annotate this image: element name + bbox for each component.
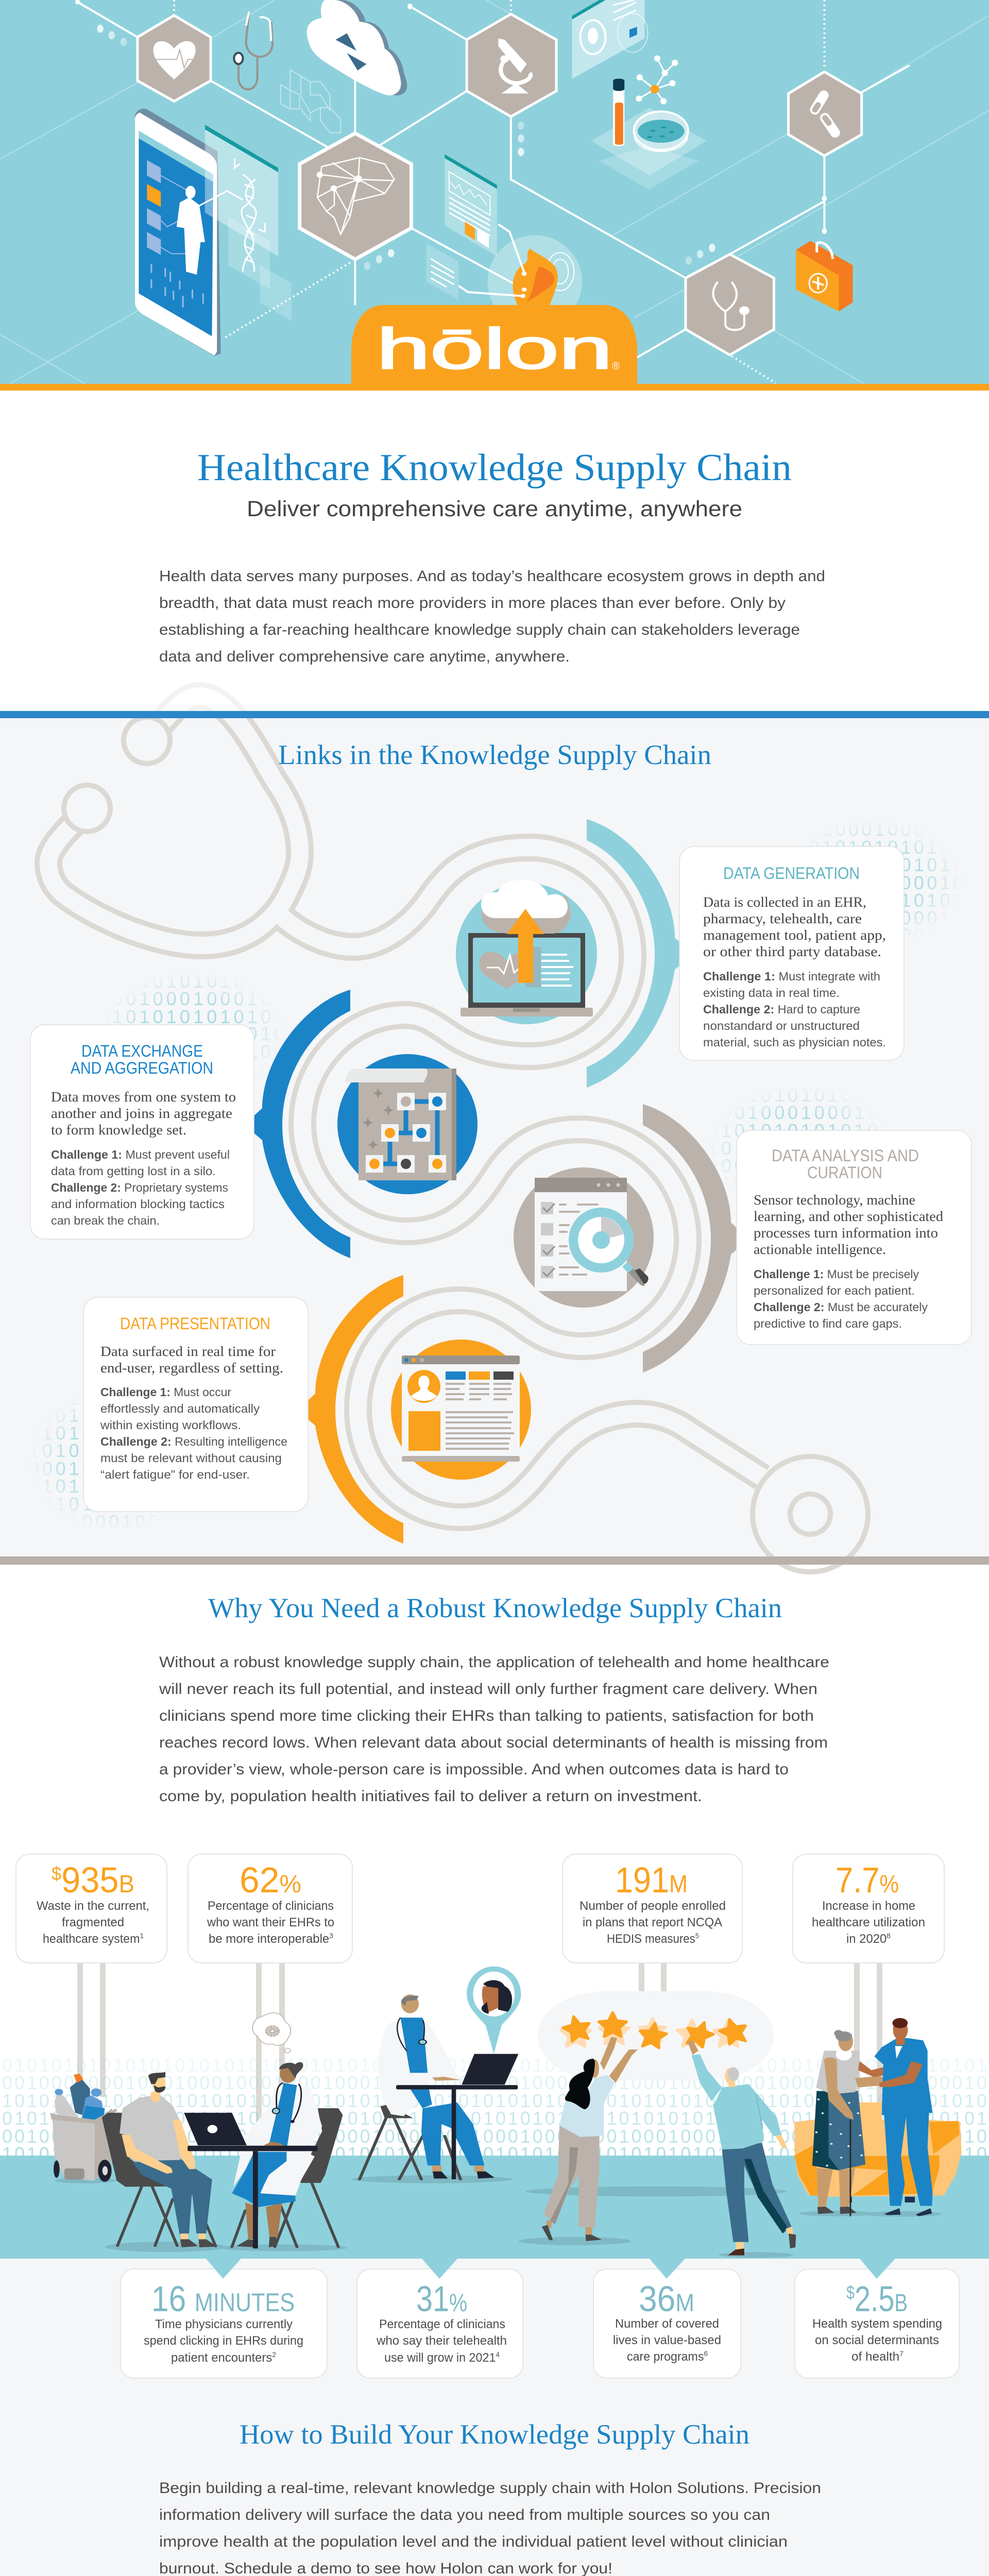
stat description: 5	[695, 1931, 699, 1940]
stat card: 2.5B	[795, 2259, 959, 2378]
challenges: data exchange: and information blocking tactics	[51, 1197, 225, 1211]
binary block left	[105, 975, 279, 1076]
scene: patient, trash and doctor at desk	[50, 2013, 347, 2252]
binary block left: 01010101010101	[99, 1059, 284, 1080]
stat description	[37, 1899, 149, 1946]
binary strip behind scene: 10101010101010101010101010101010101010101010101010101010101010101010101010101010	[2, 2143, 987, 2164]
stat description: 4	[496, 2350, 500, 2359]
stat number: 2.5	[855, 2279, 894, 2319]
binary block top right: 00101000100010	[783, 925, 963, 946]
challenges: data presentation: Challenge 2: Resulting intelligence	[100, 1435, 287, 1448]
crescent: data generation	[587, 819, 693, 1088]
binary block bottom left: 0001000100010	[29, 1458, 199, 1479]
challenges: data presentation: Challenge 1: Must occur	[100, 1385, 231, 1399]
challenges: data presentation	[100, 1385, 287, 1481]
challenges: data generation: material, such as physician notes.	[703, 1036, 886, 1049]
binary block bottom left: 1010101010101	[29, 1440, 199, 1461]
icon: DNA panel	[205, 125, 292, 321]
binary block top right: 10101010101010	[783, 854, 963, 875]
stat description: HEDIS measures	[607, 1932, 702, 1946]
stat card: 31 percent	[357, 2259, 523, 2378]
challenges: data generation: Challenge 1: Must integrate with	[703, 970, 880, 983]
icon: cloud	[307, 0, 407, 95]
how to build paragraph	[159, 2480, 821, 2576]
binary block left: 00010001000100	[99, 988, 284, 1009]
stat description: Number of people enrolled	[579, 1899, 726, 1913]
logo tab: ®	[612, 361, 620, 372]
stat description: use will grow in 2021	[384, 2351, 499, 2365]
binary block top right: 00101010100010	[783, 872, 963, 893]
stat description: Increase in home	[822, 1899, 915, 1913]
chair: patient	[102, 2113, 216, 2246]
stat description: 7	[899, 2349, 903, 2358]
blue divider bar	[0, 711, 989, 718]
binary block left: 10101010101010	[99, 1077, 284, 1098]
panel: data analysis and curation	[737, 1130, 971, 1345]
description: data generation: management tool, patient app,	[703, 927, 886, 943]
stat description	[579, 1899, 726, 1946]
sofa	[794, 2103, 962, 2202]
binary block bottom left	[33, 1400, 158, 1528]
stethoscope chain line	[48, 696, 762, 1517]
older man reaching figure	[688, 2040, 796, 2256]
connector lines	[78, 0, 910, 383]
crescent: data exchange	[244, 990, 350, 1258]
section heading: how to build: How to Build Your Knowledge Supply Chain	[240, 2419, 749, 2450]
stat description: spend clicking in EHRs during	[144, 2334, 303, 2348]
heading: data generation: DATA GENERATION	[723, 864, 860, 883]
chair: doctor	[232, 2108, 343, 2247]
stat description	[376, 2317, 507, 2365]
stat description: fragmented	[62, 1916, 124, 1929]
description: data exchange: Data moves from one system to	[51, 1089, 236, 1105]
stat description	[144, 2317, 303, 2365]
stool	[360, 2105, 461, 2179]
description: data generation: pharmacy, telehealth, care	[703, 911, 862, 926]
challenges: data analysis: Challenge 1: Must be precisely	[754, 1267, 919, 1281]
standing doctor figure	[377, 1994, 494, 2178]
intro paragraph: Health data serves many purposes. And as today’s healthcare ecosystem grows in depth and	[159, 568, 825, 585]
senior woman figure	[812, 2030, 892, 2216]
why paragraph	[159, 1654, 829, 1805]
challenges: data analysis: personalized for each patient.	[754, 1284, 915, 1297]
seated doctor figure	[232, 2062, 322, 2247]
description: data exchange: another and joins in aggregate	[51, 1106, 232, 1121]
stat description: Time physicians currently	[155, 2317, 293, 2331]
binary strip behind scene: 01010101010101010101010101010101010101010101010101010101010101010101010101010101	[2, 2055, 987, 2076]
patient figure	[120, 2072, 217, 2247]
binary block top right: 01010101010101	[783, 837, 963, 858]
binary block centre right: 10101010101010	[708, 1190, 891, 1211]
stat description: Number of covered	[615, 2317, 719, 2331]
stat number: 191M	[615, 1860, 688, 1900]
stat description: Percentage of clinicians	[379, 2317, 505, 2331]
stat description: 2	[272, 2350, 276, 2359]
binary strip behind scene: 00100010001000100010001000100010001000100010001000100010001000100010001000100010	[2, 2126, 987, 2147]
heading: data presentation: DATA PRESENTATION	[120, 1314, 270, 1333]
how to build paragraph: information delivery will surface the data you need from multiple sources so you can	[159, 2506, 770, 2523]
stat card: 191M	[562, 1854, 742, 1963]
panel: data exchange and aggregation	[30, 1025, 254, 1239]
binary block left: 10101010101010	[99, 1023, 284, 1044]
logo tab	[351, 305, 637, 384]
why paragraph: come by, population health initiatives fail to deliver a return on investment.	[159, 1788, 702, 1805]
description: data generation: Data is collected in an EHR,	[703, 894, 866, 910]
stat description: patient encounters	[171, 2351, 272, 2365]
subtitle: Deliver comprehensive care anytime, anywhere	[247, 497, 742, 521]
logo wordmark: hōlon	[377, 317, 612, 381]
intro paragraph: establishing a far-reaching healthcare knowledge supply chain can stakeholders leverage	[159, 621, 800, 638]
stat number: 935	[61, 1860, 118, 1900]
desk and laptop	[396, 2054, 519, 2179]
hero banner	[0, 0, 989, 384]
binary block top right	[810, 822, 958, 937]
scene: people reaching for stars and senior care	[519, 2012, 962, 2258]
section heading: links: Links in the Knowledge Supply Chain	[278, 739, 711, 770]
challenges: data exchange	[51, 1148, 230, 1227]
woman reaching figure	[542, 2037, 638, 2241]
stat description	[207, 1899, 334, 1946]
stat description: who want their EHRs to	[207, 1916, 334, 1929]
stat number: $	[846, 2282, 855, 2303]
stat card: 36M	[593, 2259, 741, 2378]
challenges: data presentation: must be relevant without causing	[100, 1451, 282, 1465]
description: data exchange: to form knowledge set.	[51, 1122, 186, 1138]
challenges: data presentation: within existing workflows.	[100, 1418, 241, 1432]
why paragraph: reaches record lows. When relevant data about social determinants of health is missing from	[159, 1734, 828, 1751]
stat description: be more interoperable	[209, 1932, 330, 1946]
main title: Healthcare Knowledge Supply Chain	[197, 447, 792, 489]
stat description: healthcare system	[43, 1932, 143, 1946]
crescent: data analysis	[643, 1104, 749, 1372]
heading: data exchange	[71, 1042, 213, 1077]
description: data analysis: Sensor technology, machine	[754, 1192, 915, 1208]
desk and laptop	[184, 2113, 318, 2248]
icon: document panels	[427, 154, 497, 300]
challenges: data analysis: Challenge 2: Must be accurately	[754, 1300, 928, 1314]
shadows	[519, 2187, 942, 2258]
challenges: data exchange: Challenge 1: Must prevent useful	[51, 1148, 230, 1161]
stethoscope faint top above divider	[155, 682, 247, 711]
binary block left: 00010001000100	[99, 1041, 284, 1062]
why paragraph: will never reach its full potential, and instead will only further fragment care delivery. When	[159, 1681, 817, 1698]
stat card: 935B waste	[16, 1854, 167, 1963]
stat description	[613, 2317, 721, 2364]
stat number: 31%	[416, 2279, 467, 2319]
stat card: 16 minutes	[121, 2259, 327, 2378]
icon: anatomical heart	[458, 224, 582, 329]
speech bubble for stars	[538, 1991, 774, 2080]
description: data presentation: end-user, regardless of setting.	[100, 1360, 283, 1376]
binary block centre right: 10101010101010	[708, 1138, 891, 1159]
section heading: why: Why You Need a Robust Knowledge Supply Chain	[208, 1592, 782, 1623]
orange banner bar	[0, 384, 989, 391]
icon: laptop with cloud upload	[456, 880, 597, 1024]
heading: data analysis	[772, 1146, 919, 1182]
nurse figure	[858, 2018, 932, 2216]
intro paragraph: data and deliver comprehensive care anytime, anywhere.	[159, 648, 570, 665]
stat number: 36M	[639, 2279, 694, 2319]
icon: tablet with patient record	[135, 109, 243, 356]
icon: circuit board document	[337, 1054, 478, 1194]
description: data presentation: Data surfaced in real time for	[100, 1344, 276, 1359]
how to build paragraph: improve health at the population level and the individual patient level without clinician	[159, 2533, 788, 2550]
description: data analysis	[754, 1192, 944, 1257]
icon: wire cubes	[281, 70, 340, 133]
stat description: healthcare utilization	[812, 1916, 925, 1929]
icon: hexagon brain	[300, 133, 411, 259]
icon: stethoscope	[234, 11, 272, 89]
icon: location pin with face	[467, 1967, 521, 2054]
stat description	[812, 1899, 925, 1946]
binary block centre right: 00010001000100	[708, 1102, 891, 1123]
intro paragraph	[159, 568, 825, 665]
description: data generation	[703, 894, 886, 959]
stat number: $	[52, 1863, 61, 1884]
challenges: data analysis: predictive to find care gaps.	[754, 1317, 902, 1330]
scene: doctor on laptop with location pin	[351, 1967, 521, 2183]
stat number: B	[118, 1871, 134, 1898]
binary block centre right	[713, 1088, 877, 1187]
binary block top right: 10001010100010	[783, 907, 963, 928]
challenges: data generation: existing data in real time.	[703, 986, 840, 999]
thought bubble with gear	[252, 2013, 291, 2053]
binary background blocks	[29, 819, 963, 1532]
icon: hexagon pills	[789, 72, 862, 156]
binary strip behind scene: 00100010001000100010001000100010001000100010001000100010001000100010001000100010	[2, 2072, 987, 2093]
why paragraph: a provider’s view, whole-person care is impossible. And when outcomes data is hard to	[159, 1761, 789, 1778]
stat description	[812, 2317, 942, 2364]
panel: data presentation	[83, 1297, 308, 1512]
why paragraph: clinicians spend more time clicking their EHRs than talking to patients, satisfaction for both	[159, 1707, 814, 1724]
challenges: data exchange: Challenge 2: Proprietary systems	[51, 1181, 228, 1194]
thin diagonal grid lines	[0, 0, 989, 384]
binary block centre right: 01010101010101	[708, 1120, 891, 1141]
stat description: who say their telehealth	[376, 2334, 507, 2348]
stat description: care programs	[627, 2350, 707, 2364]
stat card: 7.7 percent	[793, 1854, 944, 1963]
crescent: data presentation	[297, 1275, 403, 1544]
signpost poles	[77, 1963, 882, 2128]
shadow	[351, 2175, 513, 2183]
grey divider bar	[0, 1556, 989, 1565]
challenges: data exchange: can break the chain.	[51, 1214, 160, 1227]
binary block top right: 01010101010101	[783, 890, 963, 911]
stat description: Waste in the current,	[37, 1899, 149, 1913]
callout pointer	[206, 2259, 241, 2279]
description: data generation: or other third party database.	[703, 944, 881, 959]
binary block bottom left: 0101010101010	[29, 1476, 199, 1497]
challenges: data analysis	[754, 1267, 928, 1330]
binary block bottom left: 0001000100010	[29, 1511, 199, 1532]
icon: window panel	[572, 0, 648, 79]
stat description: lives in value-based	[613, 2333, 721, 2347]
binary block top right: 00010001000100	[783, 819, 963, 840]
binary block left: 01010101010101	[99, 1006, 284, 1027]
description: data exchange	[51, 1089, 236, 1138]
binary strip behind scene	[2, 2055, 987, 2164]
icon: hexagon microscope	[467, 14, 556, 116]
stat description: Percentage of clinicians	[208, 1899, 334, 1913]
stat description: 1	[140, 1931, 144, 1940]
shadows	[55, 2178, 347, 2252]
description: data presentation	[100, 1344, 283, 1376]
description: data analysis: actionable intelligence.	[754, 1242, 886, 1257]
stat description: in plans that report NCQA	[583, 1916, 722, 1929]
challenges: data generation: nonstandard or unstructured	[703, 1019, 860, 1032]
stat description: on social determinants	[815, 2333, 939, 2347]
icon: petri dish and test tube	[591, 55, 706, 190]
heading: data analysis: DATA ANALYSIS AND	[772, 1146, 919, 1165]
heading: data exchange: DATA EXCHANGE	[81, 1042, 203, 1060]
stethoscope chest piece	[753, 1456, 868, 1572]
stat description: 8	[886, 1931, 891, 1940]
binary block centre right: 00010001000100	[708, 1155, 891, 1176]
challenges: data presentation: effortlessly and automatically	[100, 1402, 260, 1415]
binary strip behind scene: 01010101010101010101010101010101010101010101010101010101010101010101010101010101	[2, 2108, 987, 2129]
binary block bottom left: 0101010101010	[29, 1422, 199, 1444]
binary block bottom left: 0101010101010	[29, 1387, 199, 1409]
callout pointer	[860, 2259, 895, 2279]
callout pointer	[422, 2259, 457, 2279]
icon: hexagon heart	[138, 15, 211, 101]
callout pointer	[650, 2259, 685, 2279]
icon: browser profile page	[391, 1340, 531, 1480]
stat description: in 2020	[846, 1932, 887, 1946]
description: data analysis: processes turn information into	[754, 1225, 938, 1241]
how to build paragraph: Begin building a real-time, relevant knowledge supply chain with Holon Solutions. Precision	[159, 2480, 821, 2497]
heading: data analysis: CURATION	[807, 1163, 882, 1182]
why paragraph: Without a robust knowledge supply chain, the application of telehealth and home healthcare	[159, 1654, 829, 1671]
stat description: 6	[704, 2349, 708, 2358]
stat number: 62%	[240, 1860, 301, 1900]
stat card: 62 percent	[188, 1854, 352, 1963]
board sparkles	[363, 1088, 394, 1150]
star ratings	[560, 2012, 751, 2048]
stat number: 16 MINUTES	[151, 2279, 295, 2319]
trash cart with bottles	[50, 2074, 116, 2182]
stat description: of health	[851, 2350, 899, 2364]
binary strip behind scene: 10101010101010101010101010101010101010101010101010101010101010101010101010101010	[2, 2090, 987, 2111]
intro paragraph: breadth, that data must reach more providers in more places than ever before. Only by	[159, 595, 786, 612]
icon: medical kit	[796, 241, 853, 311]
panel: data generation	[679, 846, 904, 1060]
challenges: data exchange: data from getting lost in a silo.	[51, 1164, 216, 1178]
description: data analysis: learning, and other sophisticated	[754, 1209, 944, 1224]
icon: magnifier over checklist	[514, 1167, 654, 1308]
stat number: 7.7%	[835, 1860, 899, 1900]
heading: data exchange: AND AGGREGATION	[71, 1059, 213, 1077]
hero network illustration	[0, 0, 989, 384]
binary block centre right: 01010101010101	[708, 1084, 891, 1106]
challenges: data generation	[703, 970, 886, 1049]
binary block centre right: 01010101010101	[708, 1173, 891, 1194]
teal floor	[0, 2156, 989, 2259]
icon: hexagon stethoscope	[686, 254, 774, 355]
stat description: 3	[329, 1931, 333, 1940]
stat description: Health system spending	[812, 2317, 942, 2331]
binary block left: 01010101010101	[99, 971, 284, 992]
challenges: data presentation: “alert fatigue” for end-user.	[100, 1468, 250, 1481]
binary block bottom left: 0001000100010	[29, 1405, 199, 1426]
binary block bottom left: 1010101010101	[29, 1494, 199, 1515]
stat number: B	[894, 2290, 908, 2317]
dots	[75, 0, 827, 270]
challenges: data generation: Challenge 2: Hard to capture	[703, 1003, 860, 1016]
